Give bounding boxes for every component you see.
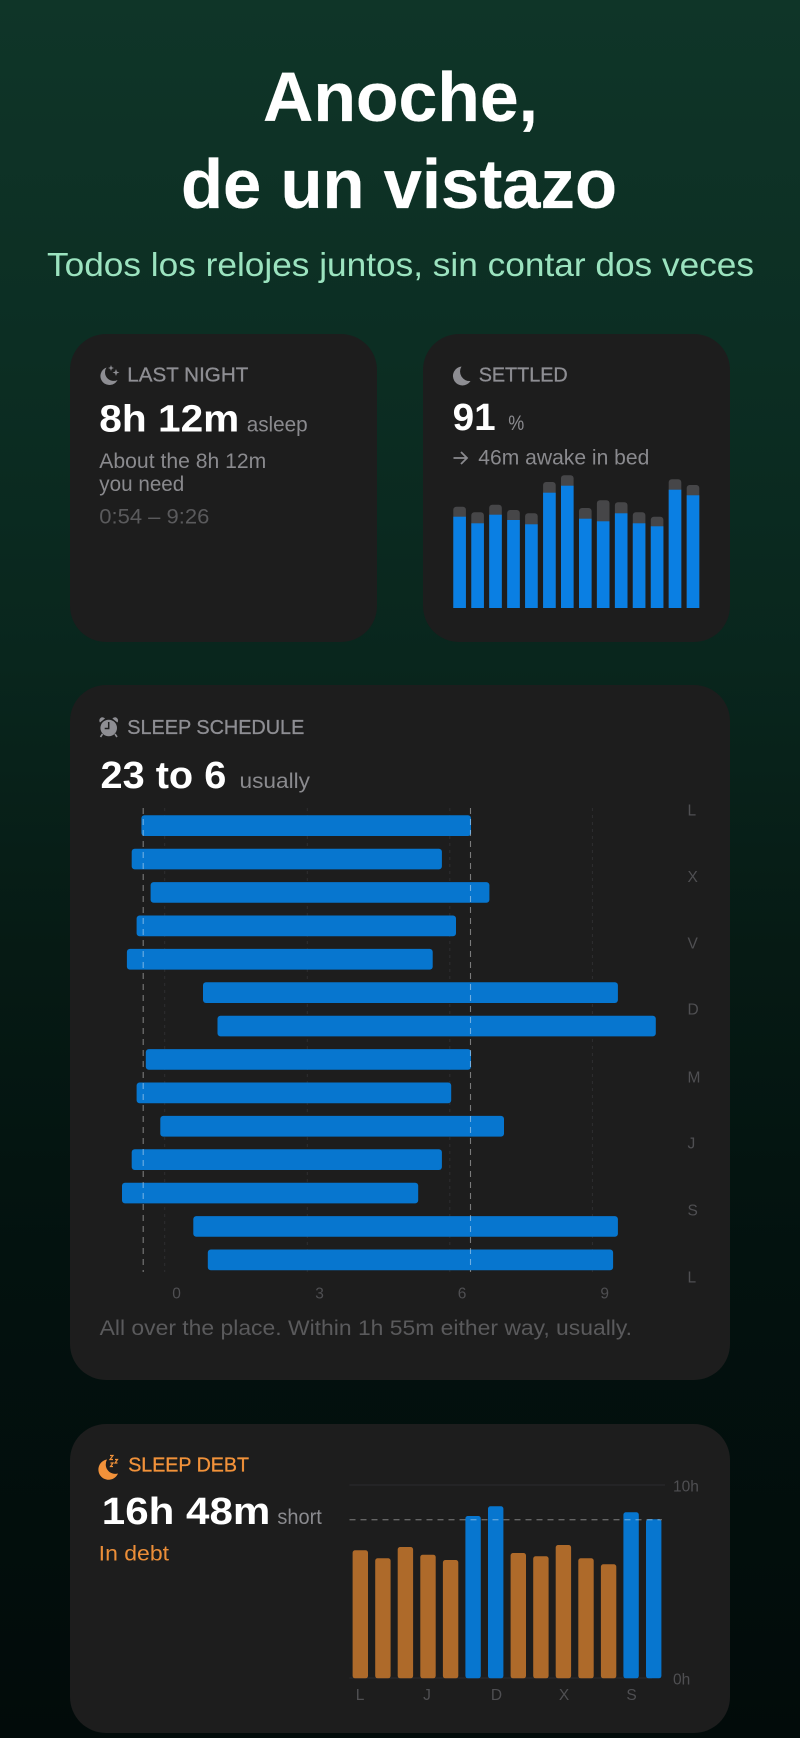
unit: usually: usually [240, 769, 310, 793]
caption: schedule note: All over the place. Within 1h 55m either way, usually. [100, 1317, 632, 1340]
text: awake in bed: 46m awake in bed [478, 446, 649, 469]
heading: sleep debt: SLEEP DEBT [128, 1455, 249, 1477]
panel: sleep schedule [70, 685, 730, 1380]
x axis day labels: J [423, 1687, 431, 1704]
text: sleep need: About the 8h 12m [99, 450, 266, 473]
top grid line [350, 1484, 665, 1486]
sleep need line [350, 1519, 662, 1521]
bar chart: nightly sleep [353, 1506, 661, 1678]
text: sleep window: 0:54 – 9:26 [99, 505, 209, 528]
icon: alarm clock [99, 717, 118, 737]
y axis day labels [688, 802, 700, 1286]
baseline [350, 1677, 652, 1679]
y axis day labels: L [688, 1270, 696, 1286]
hour grid lines [165, 808, 592, 1272]
icon: moon with zzz [98, 1456, 118, 1480]
heading: sleep schedule: SLEEP SCHEDULE [127, 717, 304, 739]
y axis labels [673, 1478, 699, 1688]
title [181, 58, 617, 223]
icon: moon with stars [100, 365, 120, 385]
y axis labels: 0h [673, 1672, 690, 1688]
x axis day labels [356, 1687, 637, 1704]
x axis hour labels: 0 [172, 1286, 181, 1302]
icon: arrow [454, 452, 467, 464]
y axis day labels: J [688, 1136, 695, 1152]
unit: short: short [277, 1505, 322, 1529]
x axis hour labels: 9 [600, 1286, 609, 1302]
y axis day labels: X [688, 869, 698, 886]
y axis labels: 10h [673, 1478, 699, 1496]
x axis day labels: L [356, 1687, 365, 1704]
bar chart: settled time [453, 486, 699, 608]
x axis day labels: X [559, 1687, 570, 1704]
typical bedtime and wake lines [143, 808, 470, 1272]
panel: sleep debt [70, 1424, 730, 1733]
icon: crescent moon [453, 366, 470, 385]
unit: asleep: asleep [247, 413, 308, 437]
value: 23 to 6: 23 to 6 [100, 755, 226, 797]
y axis day labels: V [688, 936, 698, 952]
x axis hour labels: 3 [315, 1286, 324, 1302]
y axis day labels: M [688, 1070, 700, 1086]
heading: last night: LAST NIGHT [127, 365, 248, 387]
y axis day labels: D [688, 1002, 699, 1018]
subtitle: Todos los relojes juntos, sin contar dos veces [47, 246, 754, 283]
text: sleep need [99, 450, 266, 496]
x axis day labels: D [491, 1687, 502, 1704]
unit: percent: % [508, 411, 524, 435]
panel: last night [70, 334, 377, 642]
title: de un vistazo [181, 145, 617, 223]
bar chart: awake time [453, 475, 699, 608]
x axis hour labels [172, 1286, 609, 1302]
chart: sleep windows [122, 815, 656, 1270]
heading: settled: SETTLED [479, 365, 568, 387]
y axis day labels: S [688, 1202, 698, 1220]
panel: settled [423, 334, 730, 642]
y axis day labels: L [688, 802, 696, 820]
x axis day labels: S [626, 1687, 637, 1704]
status: in debt: In debt [99, 1542, 169, 1566]
title: Anoche, [263, 58, 538, 136]
x axis hour labels: 6 [458, 1286, 466, 1302]
text: sleep need: you need [99, 473, 184, 496]
value: hours asleep: 8h 12m [99, 399, 239, 441]
value: 91 percent: 91 [453, 397, 496, 439]
value: hours short: 16h 48m [102, 1491, 270, 1533]
